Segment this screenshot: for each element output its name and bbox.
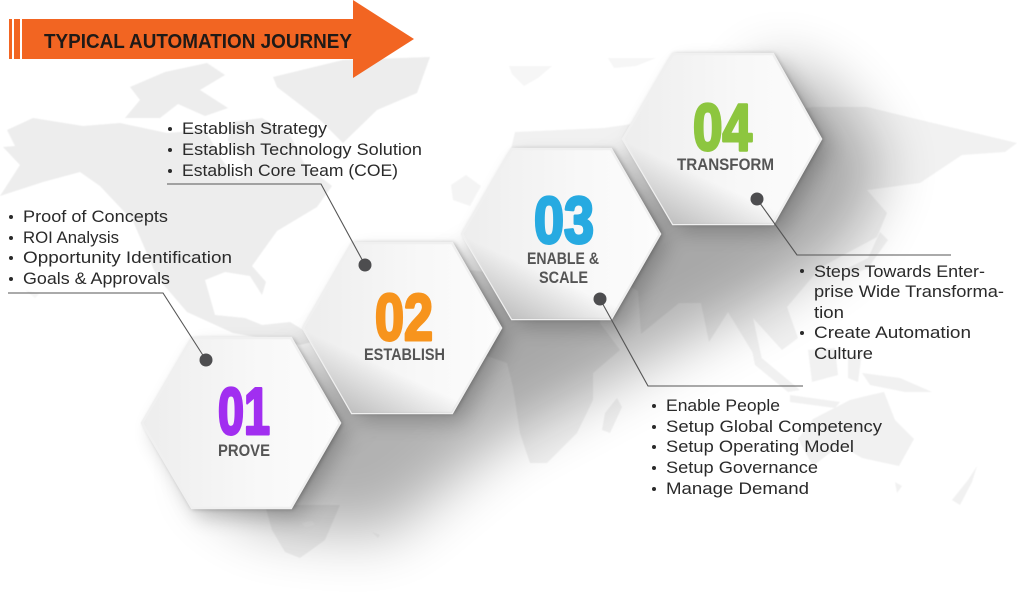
small islands — [25, 58, 656, 538]
text block: transform list: Culture — [814, 345, 873, 363]
uk — [451, 175, 481, 206]
text block: enable list — [652, 397, 883, 498]
text block: enable list: Setup Governance — [666, 459, 818, 477]
africa — [450, 270, 620, 463]
south america — [265, 505, 340, 558]
text block: prove list: Goals & Approvals — [23, 270, 170, 288]
panel: step 03 enable and scale — [462, 149, 660, 319]
text block: establish list — [168, 120, 422, 180]
panel: step 01 prove — [142, 338, 340, 508]
callout: enable connector — [594, 292, 803, 386]
north america — [0, 118, 332, 345]
text block: enable list: Enable People — [666, 397, 780, 415]
callout: establish connector — [167, 184, 372, 272]
text block: establish list: Establish Strategy — [182, 120, 328, 138]
number 03: 03 — [534, 183, 594, 257]
label enable and scale: ENABLE & — [527, 250, 599, 268]
label prove: PROVE — [218, 442, 270, 460]
text block: transform list: tion — [814, 304, 844, 322]
text block: prove list — [9, 208, 232, 288]
text block: enable list: Manage Demand — [666, 480, 809, 498]
text block: enable list: Setup Global Competency — [666, 418, 883, 436]
text block: establish list: Establish Technology Solution — [182, 141, 422, 159]
title: TYPICAL AUTOMATION JOURNEY — [44, 31, 353, 53]
label transform: TRANSFORM — [677, 156, 774, 174]
text block: transform list: Steps Towards Enter- — [814, 263, 985, 281]
text block: transform list — [800, 263, 1004, 363]
text block: transform list: Create Automation — [814, 324, 971, 342]
text block: prove list: Proof of Concepts — [23, 208, 168, 226]
new guinea — [862, 373, 932, 392]
hexagon cast shadows — [144, 54, 885, 535]
eurasia — [480, 107, 1017, 373]
text block: prove list: Opportunity Identification — [23, 249, 232, 267]
header arrow — [9, 0, 414, 78]
text block: establish list: Establish Core Team (COE) — [182, 162, 398, 180]
number 04: 04 — [693, 90, 752, 164]
madagascar — [602, 398, 622, 433]
japan — [848, 232, 888, 276]
text block: transform list: prise Wide Transforma- — [814, 283, 1004, 301]
number 02: 02 — [375, 280, 433, 354]
arctic islands — [125, 63, 228, 118]
australia — [798, 392, 914, 466]
callout: transform connector — [750, 192, 951, 255]
panel: step 02 establish — [303, 243, 501, 413]
callout: prove connector — [8, 293, 212, 366]
panel: step 04 transform — [623, 54, 821, 224]
new zealand — [895, 466, 977, 505]
label establish: ESTABLISH — [364, 346, 445, 364]
label enable and scale: SCALE — [539, 269, 588, 287]
greenland — [273, 57, 430, 143]
text block: prove list: ROI Analysis — [23, 229, 119, 247]
label enable and scale — [527, 250, 599, 287]
indonesia — [752, 348, 862, 408]
number 01: 01 — [218, 374, 270, 448]
text block: enable list: Setup Operating Model — [666, 438, 854, 456]
